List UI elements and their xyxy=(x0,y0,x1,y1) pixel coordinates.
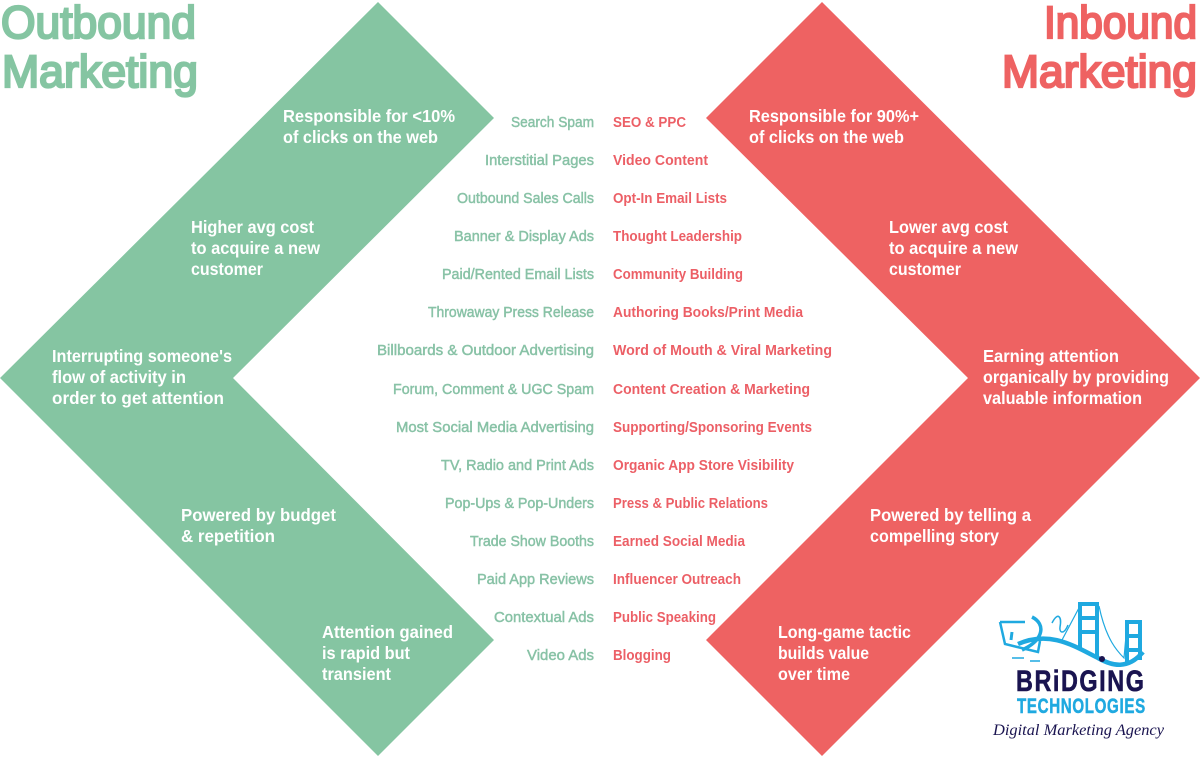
text block: outbound clicks xyxy=(283,106,455,147)
list: inbound tactics: Press & Public Relations xyxy=(613,496,768,512)
text block: inbound earning xyxy=(983,346,1169,408)
logo text: tagline: Digital Marketing Agency xyxy=(992,722,1164,739)
list: outbound tactics: Billboards & Outdoor Advertising xyxy=(377,343,594,359)
title: Outbound Marketing: Marketing xyxy=(2,46,198,97)
list: inbound tactics: Opt-In Email Lists xyxy=(613,191,727,207)
list: inbound tactics: Word of Mouth & Viral Marketing xyxy=(613,343,832,359)
title: Inbound Marketing xyxy=(1002,0,1197,97)
title: Outbound Marketing xyxy=(1,0,198,97)
text block: outbound rapid: is rapid but xyxy=(322,643,410,663)
panel: inbound chevron xyxy=(706,2,1200,756)
text block: inbound clicks xyxy=(749,106,919,147)
list: inbound tactics: Influencer Outreach xyxy=(613,572,741,588)
list: outbound tactics: Contextual Ads xyxy=(494,610,594,626)
text block: outbound cost xyxy=(191,217,320,279)
list: inbound tactics xyxy=(613,115,832,664)
text block: inbound cost: Lower avg cost xyxy=(889,217,1008,237)
text block: outbound cost: to acquire a new xyxy=(191,238,320,258)
text block: outbound rapid: transient xyxy=(322,664,391,684)
text block: outbound cost: customer xyxy=(191,259,263,279)
text block: outbound rapid: Attention gained xyxy=(322,622,453,642)
list: inbound tactics: Authoring Books/Print Media xyxy=(613,305,804,321)
text block: inbound earning: Earning attention xyxy=(983,346,1119,366)
list: outbound tactics: Banner & Display Ads xyxy=(454,229,594,245)
list: outbound tactics: Forum, Comment & UGC Spam xyxy=(393,382,594,398)
text block: inbound earning: valuable information xyxy=(983,388,1142,408)
logo: Bridging Technologies xyxy=(992,603,1164,739)
text block: inbound story: Powered by telling a xyxy=(870,505,1031,525)
text block: outbound clicks: Responsible for <10% xyxy=(283,106,455,126)
list: outbound tactics: Outbound Sales Calls xyxy=(457,191,594,207)
text block: inbound clicks: of clicks on the web xyxy=(749,127,904,147)
text block: inbound long-game: Long-game tactic xyxy=(778,622,911,642)
list: inbound tactics: SEO & PPC xyxy=(613,115,686,131)
text block: inbound cost: to acquire a new xyxy=(889,238,1018,258)
text block: inbound long-game xyxy=(778,622,911,684)
icon: bridge and monitor xyxy=(1000,603,1143,665)
text block: outbound interrupting: Interrupting someone's xyxy=(52,346,232,366)
text block: outbound clicks: of clicks on the web xyxy=(283,127,438,147)
logo text: BRiDGING: BRiDGING xyxy=(1016,664,1144,698)
text block: inbound earning: organically by providing xyxy=(983,367,1169,387)
text block: inbound long-game: over time xyxy=(778,664,850,684)
text block: outbound interrupting: flow of activity in xyxy=(52,367,186,387)
list: inbound tactics: Earned Social Media xyxy=(613,534,746,550)
list: outbound tactics: Paid App Reviews xyxy=(477,572,594,588)
list: outbound tactics: Paid/Rented Email Lists xyxy=(442,267,594,283)
list: outbound tactics xyxy=(377,115,594,664)
list: inbound tactics: Thought Leadership xyxy=(613,229,742,245)
text block: inbound cost: customer xyxy=(889,259,961,279)
list: outbound tactics: Interstitial Pages xyxy=(485,153,594,169)
list: inbound tactics: Supporting/Sponsoring Events xyxy=(613,420,812,436)
text block: inbound clicks: Responsible for 90%+ xyxy=(749,106,919,126)
list: outbound tactics: Pop-Ups & Pop-Unders xyxy=(445,496,594,512)
list: outbound tactics: Most Social Media Advertising xyxy=(396,420,594,436)
text block: inbound long-game: builds value xyxy=(778,643,869,663)
title: Inbound Marketing: Marketing xyxy=(1002,46,1197,97)
text block: outbound interrupting xyxy=(52,346,232,408)
text block: outbound budget xyxy=(181,505,336,546)
list: inbound tactics: Community Building xyxy=(613,267,743,283)
text block: outbound interrupting: order to get attention xyxy=(52,388,224,408)
list: inbound tactics: Public Speaking xyxy=(613,610,716,626)
list: inbound tactics: Blogging xyxy=(613,648,671,664)
list: inbound tactics: Organic App Store Visibility xyxy=(613,458,794,474)
text block: inbound story xyxy=(870,505,1031,546)
text block: outbound rapid xyxy=(322,622,453,684)
list: inbound tactics: Content Creation & Marketing xyxy=(613,382,810,398)
panel: outbound chevron xyxy=(0,2,494,756)
list: outbound tactics: Throwaway Press Release xyxy=(428,305,594,321)
text block: inbound cost xyxy=(889,217,1018,279)
text block: outbound cost: Higher avg cost xyxy=(191,217,314,237)
text block: outbound budget: Powered by budget xyxy=(181,505,336,525)
text block: outbound budget: & repetition xyxy=(181,526,275,546)
list: outbound tactics: TV, Radio and Print Ads xyxy=(441,458,594,474)
text block: inbound story: compelling story xyxy=(870,526,999,546)
logo text: TECHNOLOGIES: TECHNOLOGIES xyxy=(1017,693,1145,718)
list: inbound tactics: Video Content xyxy=(613,153,708,169)
list: outbound tactics: Search Spam xyxy=(511,115,594,131)
list: outbound tactics: Trade Show Booths xyxy=(470,534,594,550)
list: outbound tactics: Video Ads xyxy=(527,648,594,664)
